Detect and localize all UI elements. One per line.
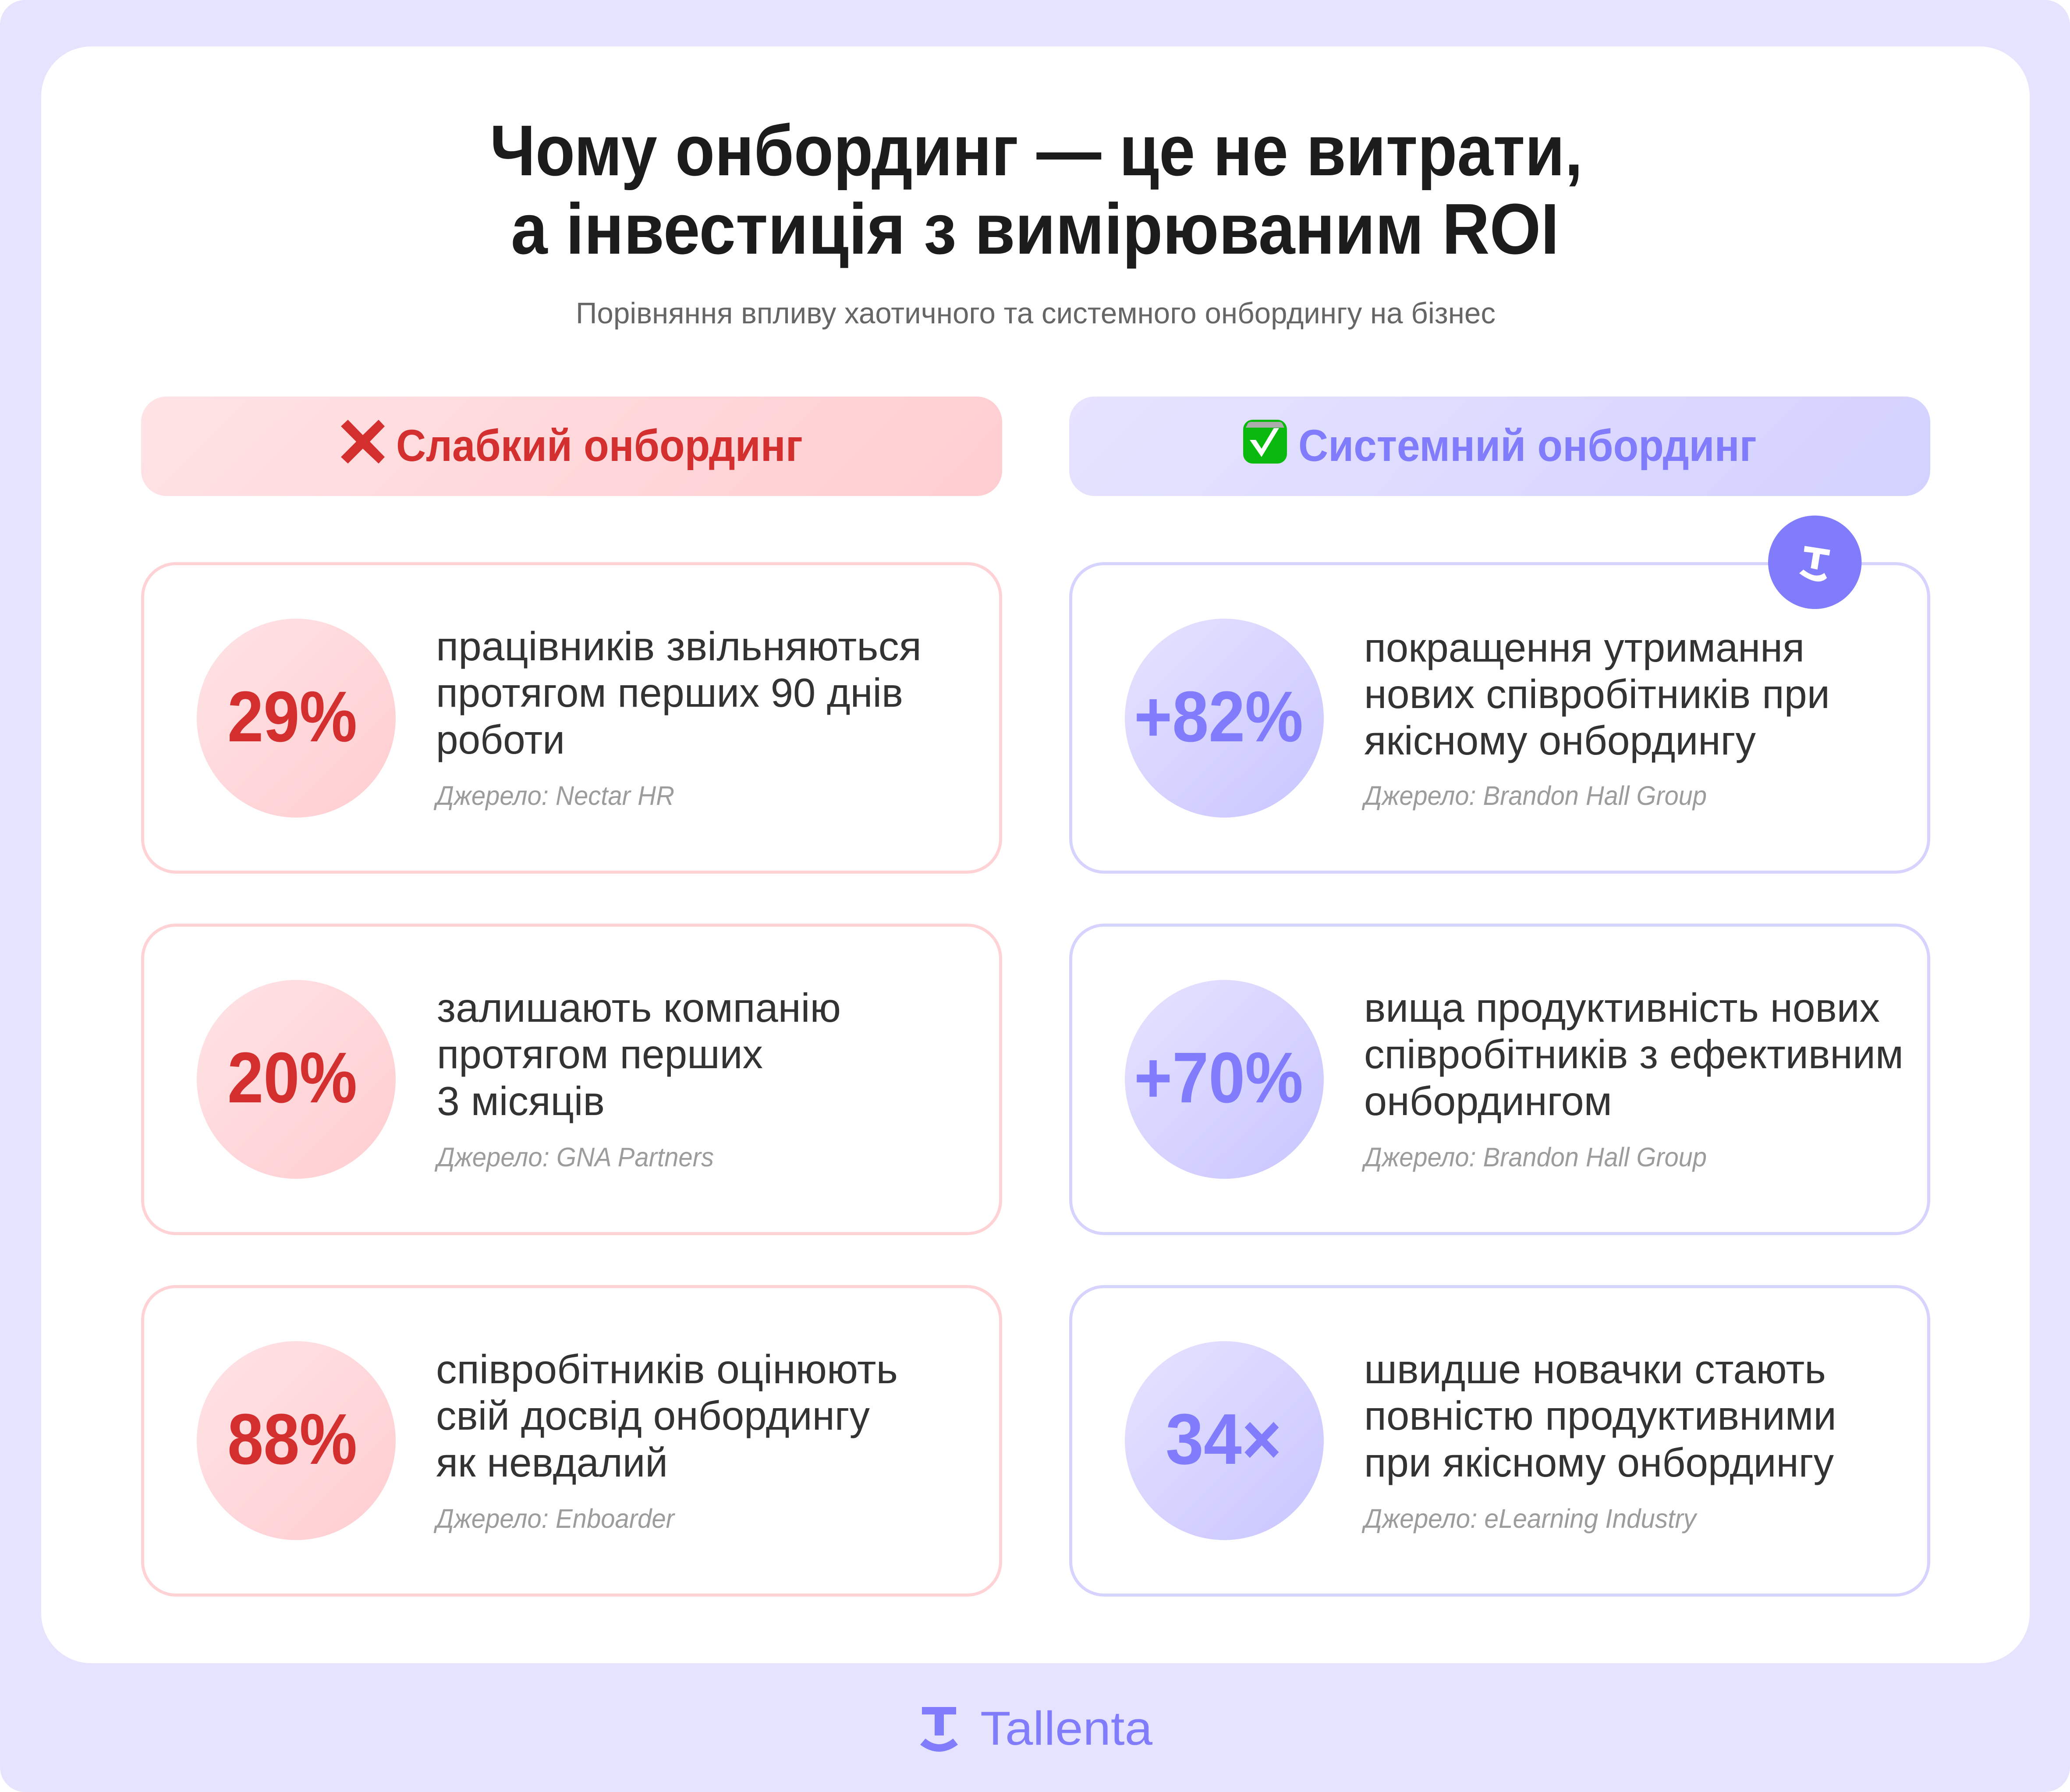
stat circle: +82%	[1125, 619, 1324, 818]
header text: systematic: Системний онбординг	[1298, 421, 1757, 471]
description: вища продуктивність нових	[1364, 985, 1880, 1031]
description: протягом перших	[437, 1031, 763, 1077]
description: протягом перших 90 днів	[436, 670, 903, 715]
description: якісному онбордингу	[1364, 718, 1756, 763]
card: 20%	[143, 925, 1001, 1234]
source: Джерело: Brandon Hall Group	[1361, 1142, 1707, 1172]
source: Джерело: Nectar HR	[433, 781, 674, 811]
description: як невдалий	[436, 1440, 668, 1485]
column header: weak onboarding	[141, 397, 1002, 496]
stat circle: 88%	[197, 1341, 396, 1540]
footer logo	[920, 1702, 1152, 1755]
card: 88%	[143, 1286, 1001, 1595]
description	[436, 623, 922, 762]
description: свій досвід онбордингу	[436, 1393, 870, 1438]
description	[1364, 985, 1903, 1124]
description: швидше новачки стають	[1364, 1346, 1826, 1392]
description: нових співробітників при	[1364, 671, 1830, 717]
stat circle: 34x: 34×	[1166, 1399, 1282, 1479]
icon: Tallenta mark	[920, 1707, 958, 1752]
description	[437, 985, 841, 1124]
description	[436, 1346, 898, 1485]
source: Джерело: Brandon Hall Group	[1361, 781, 1707, 811]
title: а інвестиція з вимірюваним ROI	[511, 189, 1559, 269]
description: працівників звільняються	[436, 623, 922, 669]
stat circle: +70%: +70%	[1134, 1038, 1303, 1118]
stat circle: 34x	[1125, 1341, 1324, 1540]
card: +82%	[1071, 563, 1929, 872]
card: 29%	[143, 563, 1001, 872]
source: Джерело: GNA Partners	[434, 1142, 714, 1172]
stat circle: +82%: +82%	[1134, 676, 1303, 757]
stat circle: 20%: 20%	[227, 1038, 357, 1118]
description: покращення утримання	[1364, 625, 1804, 670]
icon: green check	[1243, 420, 1287, 464]
column header: systematic onboarding	[1069, 397, 1930, 496]
description: співробітників з ефективним	[1364, 1031, 1903, 1077]
brand name: Tallenta	[980, 1702, 1152, 1755]
description: повністю продуктивними	[1364, 1393, 1836, 1438]
header text: weak: Слабкий онбординг	[396, 421, 803, 471]
icon: red cross	[341, 420, 385, 464]
description: онбордингом	[1364, 1078, 1612, 1124]
stat circle: 88%: 88%	[227, 1399, 357, 1479]
description: співробітників оцінюють	[436, 1346, 898, 1392]
title: Чому онбординг — це не витрати,	[490, 110, 1583, 191]
stat circle: +70%	[1125, 980, 1324, 1179]
stat circle: 29%: 29%	[227, 676, 357, 757]
card: 34x	[1071, 1286, 1929, 1595]
subtitle: Порівняння впливу хаотичного та системного онбордингу на бізнес	[576, 297, 1496, 330]
description: 3 місяців	[437, 1078, 605, 1124]
title	[490, 110, 1583, 269]
description: при якісному онбордингу	[1364, 1440, 1834, 1485]
description	[1364, 1346, 1836, 1485]
badge: logo circle	[1768, 516, 1861, 609]
stat circle: 29%	[197, 619, 396, 818]
source: Джерело: Enboarder	[433, 1504, 676, 1533]
stat circle: 20%	[197, 980, 396, 1179]
description: залишають компанію	[437, 985, 841, 1031]
card: +70%	[1071, 925, 1929, 1234]
description	[1364, 625, 1830, 763]
source: Джерело: eLearning Industry	[1361, 1504, 1698, 1533]
description: роботи	[436, 717, 565, 762]
